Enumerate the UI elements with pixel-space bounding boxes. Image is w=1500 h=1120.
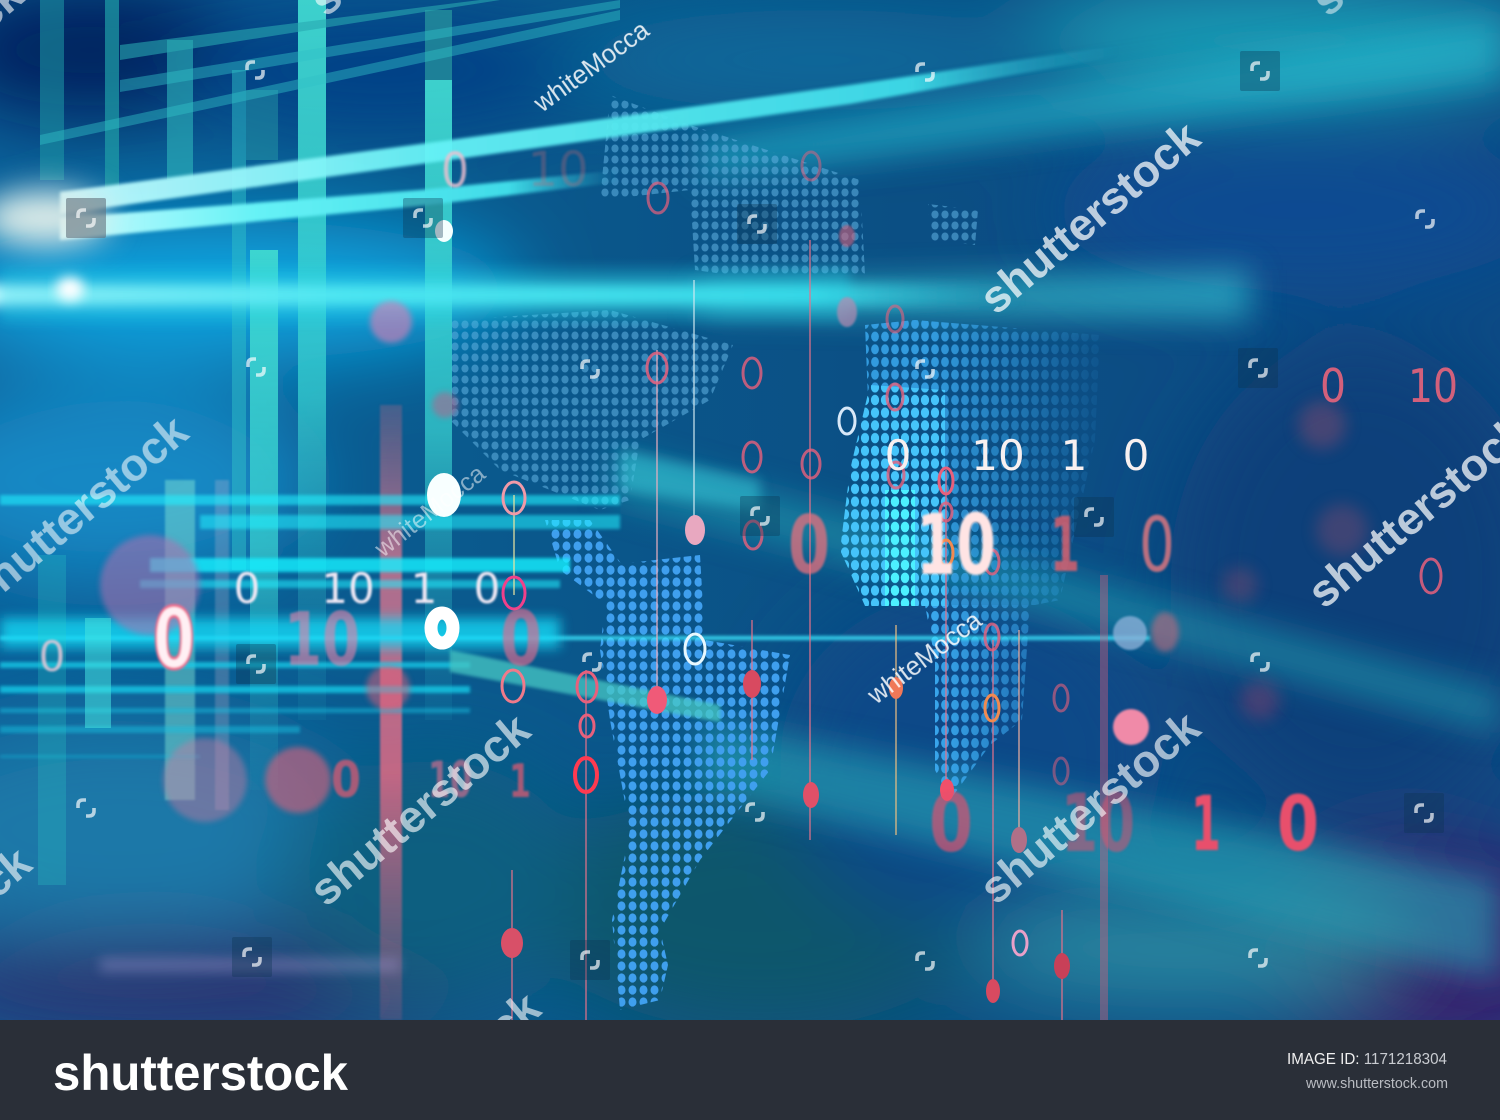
digits: map white row: 0 [1123,431,1149,480]
digits: blurred left: 0 [441,143,469,199]
map: europe upper [865,320,1100,605]
vertical data pins with nodes [512,240,1108,1020]
digits: upper right: 0 [1320,359,1346,413]
digits: upper right [1320,359,1458,413]
digits: map white row [885,431,1149,480]
digits: glowing center: 0 [788,499,830,592]
map: central america [545,520,640,600]
map: europe and africa [865,320,1100,800]
digits: blurred left: 10 [284,597,360,683]
digits: lower right: 1 [1191,779,1221,868]
watermarks: shutterstock [970,110,1210,324]
digits: blurred left: 1 [509,754,531,808]
digits: blurred left: 0 [39,632,65,681]
dotted world map [450,95,1100,1010]
digits: blurred left: 0 [500,594,542,683]
digits: lower right: 0 [1277,779,1319,868]
watermarks: shutterstock [970,700,1210,914]
map: small island [928,204,978,245]
watermark tile backgrounds [66,51,1444,980]
watermarks: ck [479,981,551,1053]
watermark bracket icons [78,62,1433,969]
digits: blurred left: 10 [527,142,589,198]
digits: left white row: 10 [321,564,375,613]
watermarks: shutterstock [300,702,540,916]
footer bar [0,1020,1500,1120]
digits: blurred left: 10 [428,751,472,809]
horizontal glowing data lines left [0,450,1150,972]
watermarks: whiteMocca [369,459,491,563]
digits: blurred left: 0 [331,751,361,809]
digits: left white row [234,570,500,606]
digits: glowing center: 0 [1139,500,1175,589]
digits: glowing center: 10 [916,496,996,594]
digits: lower right: 10 [1061,777,1135,870]
solid data nodes [427,220,1070,1003]
digits: glowing center [788,496,1175,594]
map: north america [450,310,733,510]
map: southern africa [925,605,1030,800]
binary digits [39,142,1458,870]
map: south america [600,555,790,1010]
vertical server bars [40,0,620,1020]
digits: left white row: 1 [411,564,437,613]
website url: www.shutterstock.com [1305,1076,1448,1092]
watermarks: whiteMocca [862,606,988,710]
digits: lower right [929,777,1319,870]
map: northern landmass [600,95,865,275]
image id: IMAGE ID: 1171218304 [1287,1051,1447,1068]
digits: blurred left: 0 [153,590,195,688]
digits: left white row: 0 [234,564,260,613]
digits: map white row: 10 [971,431,1025,480]
digits: upper right: 10 [1408,359,1458,413]
watermarks: whiteMocca [528,16,655,118]
digits: left white row: 0 [474,564,500,613]
blurred pink bokeh circles [100,225,1368,822]
digits: lower right: 0 [929,777,973,870]
digits: blurred left [39,142,589,809]
map: west africa bright [840,385,945,606]
hollow data rings [431,152,1441,955]
bright light beams top left [0,45,1120,322]
digits: glowing center: 1 [1050,500,1080,589]
digits: map white row: 1 [1061,431,1087,480]
map: cyan hot stripe [885,490,915,606]
digits: map white row: 0 [885,431,911,480]
footer logo: shutterstock [53,1045,348,1101]
blurred diagonal streaks [610,20,1500,980]
